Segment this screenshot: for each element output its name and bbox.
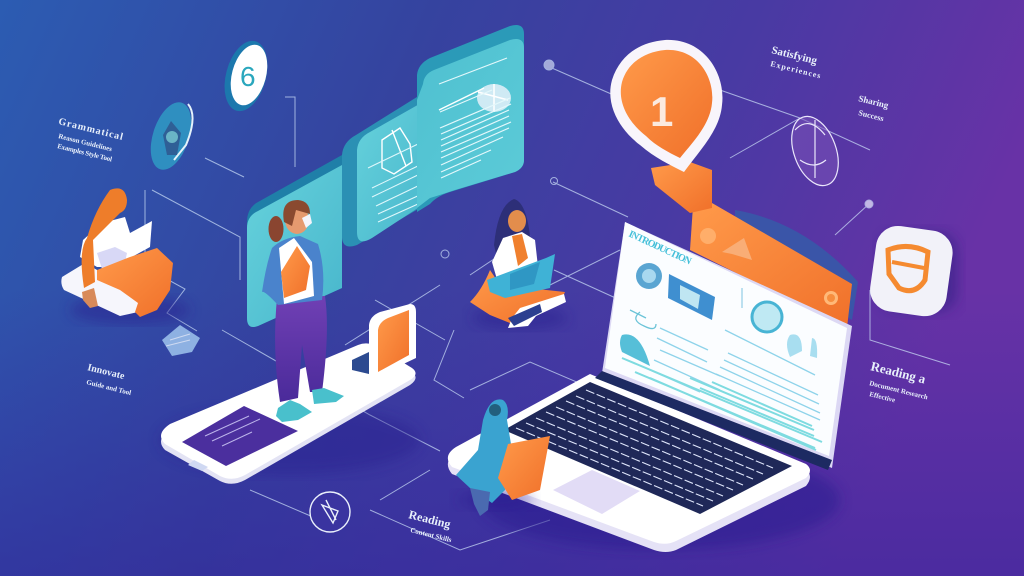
pin: large orange marker	[610, 40, 722, 213]
text: left upper label: Reason Guidelines	[58, 132, 113, 153]
platform: white tablet base	[160, 343, 420, 484]
text: bottom label: Content Skills	[410, 526, 453, 544]
text: top right label: Satisfying	[770, 44, 819, 67]
text: bottom label	[407, 507, 453, 544]
icon: wire globe right	[783, 110, 847, 192]
number one: 1	[650, 88, 673, 135]
legs	[275, 296, 327, 402]
tablet screen	[182, 406, 298, 466]
text: left upper label: Grammatical	[57, 116, 124, 143]
text lines	[368, 144, 422, 222]
lid orange	[690, 203, 852, 328]
panel: teal card right	[417, 25, 524, 212]
panel: teal card middle	[342, 92, 430, 246]
person: seated woman left	[61, 188, 190, 324]
connector lines	[145, 60, 950, 550]
text: right lower label: Document Research	[869, 379, 929, 401]
head	[285, 206, 309, 234]
hair	[82, 188, 127, 288]
icon: house sketch	[382, 128, 412, 174]
person: sitting woman with laptop	[470, 199, 568, 330]
icon: teal oval portrait	[143, 97, 199, 175]
laptop	[448, 203, 858, 552]
panel: teal card left	[247, 155, 342, 327]
text: left upper label	[57, 116, 124, 163]
text: left lower label: Innovate	[86, 362, 126, 382]
cushion	[61, 263, 140, 316]
hinge	[595, 371, 832, 470]
icon: oval badge top	[217, 36, 275, 116]
text: right upper label: Success	[858, 108, 885, 123]
keyboard	[504, 382, 792, 514]
lid back navy	[735, 210, 858, 320]
icon: oval badge top: 6	[240, 61, 256, 92]
screen text lines	[650, 328, 820, 420]
text: top right label	[770, 44, 822, 81]
text: left upper label: Examples Style Tool	[57, 142, 113, 163]
screen title: INTRODUCTION	[627, 229, 694, 268]
figure: small teal character with orange book	[456, 399, 550, 516]
skirt	[97, 248, 173, 317]
icon: orange book on platform	[352, 304, 416, 376]
text: right lower label: Reading a	[869, 358, 928, 387]
screen	[602, 222, 852, 468]
icon: small circle bottom	[310, 492, 350, 532]
base	[448, 378, 810, 552]
shoes	[276, 388, 344, 422]
hand	[82, 288, 98, 308]
text lines	[439, 58, 511, 178]
book	[130, 221, 152, 258]
text: right lower label	[869, 358, 929, 404]
icon: globe	[439, 84, 511, 112]
icon: small sketch left	[162, 325, 200, 356]
text: left lower label: Guide and Tool	[86, 378, 132, 397]
text: right upper label	[858, 93, 890, 123]
text: right lower label: Effective	[869, 390, 896, 404]
laptop	[487, 254, 555, 298]
text: left lower label	[86, 362, 132, 397]
torso	[262, 236, 323, 305]
text: top right label: Experiences	[770, 59, 822, 81]
trackpad	[553, 470, 640, 514]
text: bottom label: Reading	[407, 507, 452, 531]
torso	[80, 217, 130, 267]
person: standing woman	[262, 200, 344, 422]
icon: white rounded app badge	[867, 223, 958, 319]
text: right upper label: Sharing	[858, 93, 890, 110]
screen images	[636, 263, 662, 289]
